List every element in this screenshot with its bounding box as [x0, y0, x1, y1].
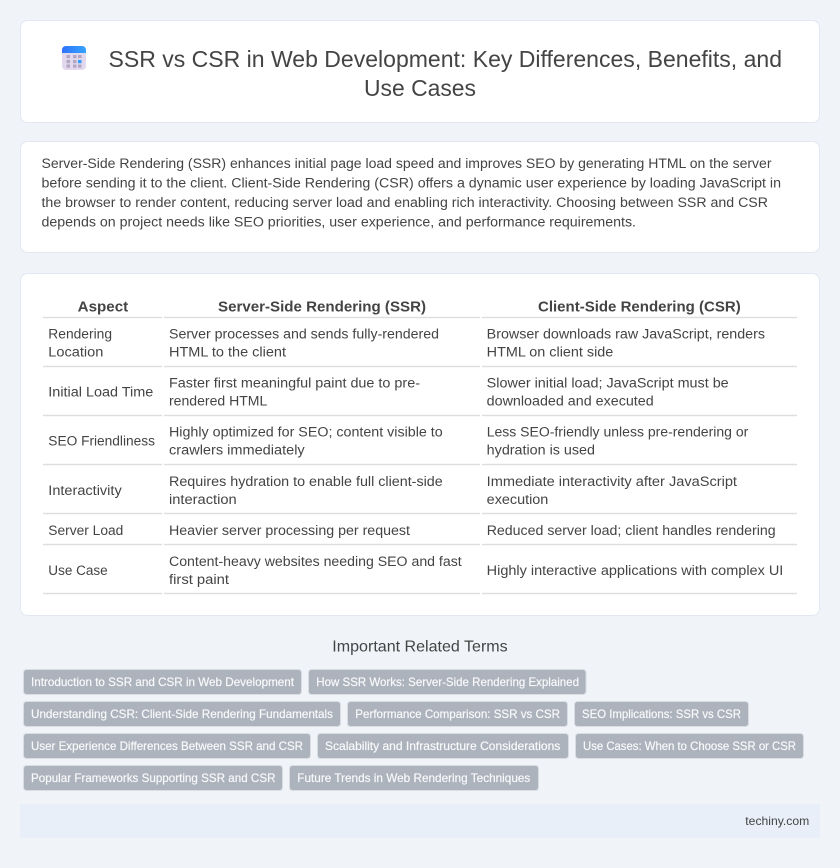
tag: Future Trends in Web Rendering Techniques	[297, 771, 530, 785]
row: rendering location	[43, 326, 797, 367]
panel: description	[20, 142, 820, 252]
description text	[42, 156, 781, 230]
row: interactivity: Immediate interactivity after JavaScript	[487, 474, 737, 490]
tag: Understanding CSR: Client-Side Rendering Fundamentals	[31, 707, 333, 721]
tag	[290, 766, 538, 790]
row: interactivity	[43, 474, 797, 514]
row: use case: Highly interactive applications with complex UI	[487, 563, 783, 579]
icon: calendar	[62, 46, 86, 70]
footer	[20, 804, 820, 838]
tag	[576, 734, 804, 758]
tag: Introduction to SSR and CSR in Web Development	[31, 675, 295, 689]
row: seo friendliness	[43, 425, 797, 465]
row: initial load time: rendered HTML	[169, 394, 267, 410]
row: rendering location: Rendering	[48, 326, 112, 342]
row: use case: first paint	[169, 572, 229, 588]
row: rendering location: Browser downloads raw JavaScript, renders	[487, 326, 765, 342]
row: seo friendliness: hydration is used	[487, 443, 595, 459]
tag: Performance Comparison: SSR vs CSR	[355, 707, 560, 721]
tag	[574, 702, 748, 726]
table header row	[43, 299, 797, 318]
row: initial load time	[43, 376, 797, 416]
panel: header	[20, 20, 820, 122]
panel: comparison table	[20, 274, 820, 616]
row: seo friendliness: SEO Friendliness	[48, 434, 155, 450]
table header row: Aspect	[78, 299, 128, 316]
row: seo friendliness: crawlers immediately	[169, 443, 306, 459]
row: initial load time: Initial Load Time	[48, 385, 153, 401]
title	[108, 46, 782, 101]
heading: related terms: Important Related Terms	[332, 639, 508, 656]
row: rendering location: HTML on client side	[487, 345, 613, 361]
title: SSR vs CSR in Web Development: Key Differences, Benefits, and	[108, 46, 782, 72]
row: interactivity: interaction	[169, 492, 237, 508]
tag: How SSR Works: Server-Side Rendering Explained	[316, 675, 579, 689]
row: rendering location: HTML to the client	[169, 345, 286, 361]
row: initial load time: downloaded and executed	[487, 394, 654, 410]
table header row: Server-Side Rendering (SSR)	[218, 299, 426, 316]
description text: the browser to render content, reducing server load and enabling rich interactivity. Choosing between SSR and CSR	[42, 195, 768, 211]
row: seo friendliness: Less SEO-friendly unless pre-rendering or	[487, 425, 749, 441]
description text: before sending it to the client. Client-Side Rendering (CSR) offers a dynamic user experience by loading JavaScript in	[42, 176, 781, 192]
tag	[318, 734, 568, 758]
tag	[24, 766, 282, 790]
tag: Use Cases: When to Choose SSR or CSR	[583, 739, 796, 753]
table header row: Client-Side Rendering (CSR)	[538, 299, 741, 316]
row: server load: Server Load	[48, 523, 123, 539]
row: interactivity: Interactivity	[48, 483, 123, 499]
footer site name: techiny.com	[745, 814, 809, 828]
row: use case: Content-heavy websites needing SEO and fast	[169, 554, 462, 570]
row: initial load time: Slower initial load; JavaScript must be	[487, 376, 729, 392]
tag	[24, 702, 340, 726]
row: rendering location: Server processes and sends fully-rendered	[169, 326, 439, 342]
tag	[24, 670, 302, 694]
description text: Server-Side Rendering (SSR) enhances initial page load speed and improves SEO by generating HTML on the server	[42, 156, 772, 172]
tag: User Experience Differences Between SSR and CSR	[31, 739, 303, 753]
tag: Scalability and Infrastructure Considerations	[325, 739, 560, 753]
row: server load	[43, 523, 797, 545]
related term tags	[24, 670, 804, 790]
row: server load: Heavier server processing per request	[169, 523, 410, 539]
description text: depends on project needs like SEO priorities, user experience, and performance requirements.	[42, 214, 636, 230]
row: server load: Reduced server load; client handles rendering	[487, 523, 776, 539]
tag: SEO Implications: SSR vs CSR	[582, 707, 741, 721]
row: rendering location: Location	[48, 345, 103, 361]
tag	[348, 702, 568, 726]
tag: Popular Frameworks Supporting SSR and CSR	[31, 771, 276, 785]
row: seo friendliness: Highly optimized for SEO; content visible to	[169, 425, 443, 441]
title: Use Cases	[364, 75, 476, 101]
tag	[308, 670, 586, 694]
row: use case	[43, 554, 797, 594]
row: interactivity: Requires hydration to enable full client-side	[169, 474, 443, 490]
row: initial load time: Faster first meaningful paint due to pre-	[169, 376, 420, 392]
tag	[24, 734, 310, 758]
row: use case: Use Case	[48, 563, 108, 579]
row: interactivity: execution	[487, 492, 548, 508]
